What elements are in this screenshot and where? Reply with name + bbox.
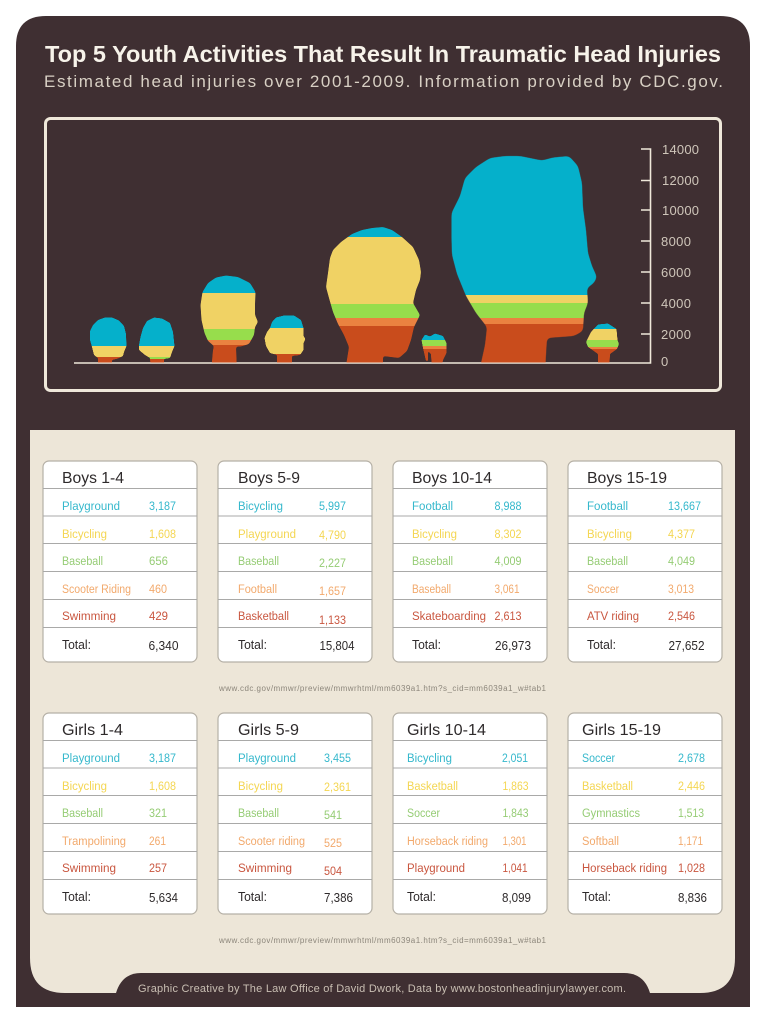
card: Girls 15-19: Girls 15-19 [582,722,661,739]
card: Boys 15-19: 4,377 [668,527,695,541]
card: Girls 1-4: 3,187 [149,751,176,765]
card: Girls 15-19: 2,678 [678,751,705,765]
head: Girls 15-19 [585,322,620,362]
card: Girls 15-19: 1,028 [678,861,705,875]
card: Boys 1-4: 460 [149,582,167,596]
cream data panel [30,430,735,993]
card: Girls 5-9: Total: [238,890,267,904]
card: Girls 5-9: 2,361 [324,780,351,794]
footer credit: Graphic Creative by The Law Office of David Dwork, Data by www.bostonheadinjurylawyer.com. [138,983,626,995]
card: Boys 5-9: 1,657 [319,584,346,598]
card: Boys 1-4: 6,340 [148,639,179,653]
chart axis with labels: 14000 [662,142,699,157]
card: Boys 1-4: Boys 1-4 [62,470,124,487]
card: Boys 15-19: ATV riding [587,609,639,623]
chart axis with labels: 10000 [662,203,699,218]
card: Girls 15-19: Total: [582,890,611,904]
head: Boys 15-19 [450,155,598,362]
card: Girls 15-19: Basketball [582,779,633,793]
card: Boys 10-14 [393,461,547,662]
card: Girls 5-9: 525 [324,836,342,850]
card: Boys 5-9: 5,997 [319,499,346,513]
card: Boys 5-9: 4,790 [319,528,346,542]
card: Girls 10-14 [393,713,547,914]
card: Boys 1-4: Scooter Riding [62,582,131,596]
card: Boys 15-19: Boys 15-19 [587,470,667,487]
card: Boys 15-19: 4,049 [668,554,695,568]
panel: head chart [46,118,720,390]
card: Girls 1-4: Playground [62,751,120,765]
card: Boys 15-19: 2,546 [668,609,695,623]
chart axis with labels: 6000 [661,265,691,280]
card: Boys 1-4: 3,187 [149,499,176,513]
card: Boys 5-9: 2,227 [319,556,346,570]
card: Girls 1-4: Total: [62,890,91,904]
head: Boys 10-14 [324,226,424,362]
card: Girls 1-4: 257 [149,861,167,875]
card: Girls 5-9: Bicycling [238,779,283,793]
card: Girls 10-14: 1,041 [502,861,528,875]
card: Girls 5-9: Girls 5-9 [238,722,299,739]
chart axis with labels: 4000 [661,296,691,311]
card: Boys 1-4: 1,608 [149,527,176,541]
card: Girls 1-4: Trampolining [62,834,126,848]
chart axis with labels: 0 [661,354,668,369]
card: Boys 10-14: 8,988 [494,499,522,513]
card: Boys 15-19: Bicycling [587,527,632,541]
source link: girls: www.cdc.gov/mmwr/preview/mmwrhtml/mm6039a1.htm?s_cid=mm6039a1_w#tab1 [218,936,547,945]
title: Top 5 Youth Activities That Result In Traumatic Head Injuries [45,41,721,67]
chart axis with labels: 12000 [662,173,699,188]
card: Boys 5-9: Bicycling [238,499,283,513]
card: Girls 10-14: Playground [407,861,465,875]
card: Boys 10-14: Boys 10-14 [412,470,492,487]
card: Girls 5-9: 7,386 [324,891,353,905]
head: Girls 10-14 [422,334,446,362]
card: Boys 1-4 [43,461,197,662]
chart frame [46,118,720,390]
card: Boys 1-4: Bicycling [62,527,107,541]
card: Boys 5-9: Basketball [238,609,289,623]
card: Girls 10-14: 1,863 [502,779,529,793]
card: Girls 10-14: 1,301 [502,834,527,848]
card: Boys 10-14: Skateboarding [412,609,486,623]
card: Girls 10-14: Basketball [407,779,458,793]
card: Girls 15-19: Soccer [582,751,615,765]
footer tab [116,973,650,1007]
card: Girls 5-9: Playground [238,751,296,765]
card: Boys 1-4: Playground [62,499,120,513]
card: Boys 5-9: Football [238,582,277,596]
card: Girls 1-4: 261 [149,834,166,848]
card: Girls 15-19: Gymnastics [582,806,640,820]
card: Boys 15-19 [568,461,722,662]
card: Boys 15-19: Baseball [587,554,628,568]
head: Boys 1-4 [90,318,126,362]
card: Girls 10-14: Horseback riding [407,834,488,848]
source link: boys: www.cdc.gov/mmwr/preview/mmwrhtml/mm6039a1.htm?s_cid=mm6039a1_w#tab1 [218,684,547,693]
card: Boys 10-14: Baseball [412,554,453,568]
card: Girls 5-9: Baseball [238,806,279,820]
card: Boys 1-4: 429 [149,609,168,623]
card: Girls 5-9 [218,713,372,914]
card: Girls 5-9: Scooter riding [238,834,305,848]
chart axis with labels: 2000 [661,327,691,342]
card: Girls 10-14: 1,843 [502,806,529,820]
card: Girls 15-19: 1,513 [678,806,704,820]
head: Girls 1-4 [139,318,174,362]
card: Boys 5-9: Baseball [238,554,279,568]
card: Boys 5-9: Total: [238,638,267,652]
card: Girls 1-4 [43,713,197,914]
card: Girls 10-14: Total: [407,890,436,904]
card: Boys 5-9: 15,804 [320,639,355,653]
card: Boys 10-14: Bicycling [412,527,457,541]
card: Girls 15-19: 1,171 [678,834,703,848]
card: Girls 10-14: Girls 10-14 [407,722,486,739]
card: Girls 5-9: 541 [324,808,342,822]
card: Girls 10-14: Soccer [407,806,440,820]
card: Boys 10-14: 3,061 [494,582,520,596]
card: Boys 1-4: Baseball [62,554,103,568]
card: Girls 5-9: 3,455 [324,751,351,765]
card: Boys 10-14: 8,302 [494,527,522,541]
card: Boys 10-14: Football [412,499,453,513]
card: Girls 15-19 [568,713,722,914]
card: Boys 10-14: 26,973 [495,639,531,653]
chart axis with labels: 8000 [661,234,691,249]
head: Girls 5-9 [264,316,306,362]
card: Girls 1-4: Bicycling [62,779,107,793]
card: Boys 5-9: 1,133 [319,613,346,627]
card: Boys 15-19: Total: [587,638,616,652]
card: Girls 1-4: 5,634 [149,891,178,905]
card: Boys 5-9: Boys 5-9 [238,470,300,487]
card: Girls 1-4: 321 [149,806,167,820]
card: Girls 1-4: Baseball [62,806,103,820]
card: Girls 15-19: Horseback riding [582,861,667,875]
card: Girls 10-14: 8,099 [502,891,531,905]
card: Boys 5-9 [218,461,372,662]
card: Boys 10-14: 2,613 [494,609,522,623]
card: Boys 5-9: Playground [238,527,296,541]
card: Boys 10-14: Baseball [412,582,451,596]
card: Girls 1-4: Girls 1-4 [62,722,123,739]
card: Girls 5-9: Swimming [238,861,292,875]
head: Boys 5-9 [198,274,260,362]
card: Boys 15-19: 3,013 [668,582,694,596]
card: Boys 10-14: Total: [412,638,441,652]
card: Girls 1-4: 1,608 [149,779,176,793]
subtitle: Estimated head injuries over 2001-2009. Information provided by CDC.gov. [44,72,723,91]
card: Boys 15-19: Soccer [587,582,619,596]
card: Girls 1-4: Swimming [62,861,116,875]
card: Girls 10-14: Bicycling [407,751,452,765]
card: Boys 1-4: 656 [149,554,168,568]
card: Boys 15-19: 27,652 [668,639,705,653]
card: Girls 10-14: 2,051 [502,751,528,765]
card: Girls 15-19: 2,446 [678,779,705,793]
card: Boys 15-19: Football [587,499,628,513]
card: Boys 15-19: 13,667 [668,499,701,513]
chart axis with labels [74,142,699,369]
card: Girls 5-9: 504 [324,864,342,878]
card: Boys 1-4: Swimming [62,609,116,623]
card: Girls 15-19: Softball [582,834,619,848]
card: Girls 15-19: 8,836 [678,891,707,905]
card: Boys 1-4: Total: [62,638,91,652]
card: Boys 10-14: 4,009 [494,554,522,568]
